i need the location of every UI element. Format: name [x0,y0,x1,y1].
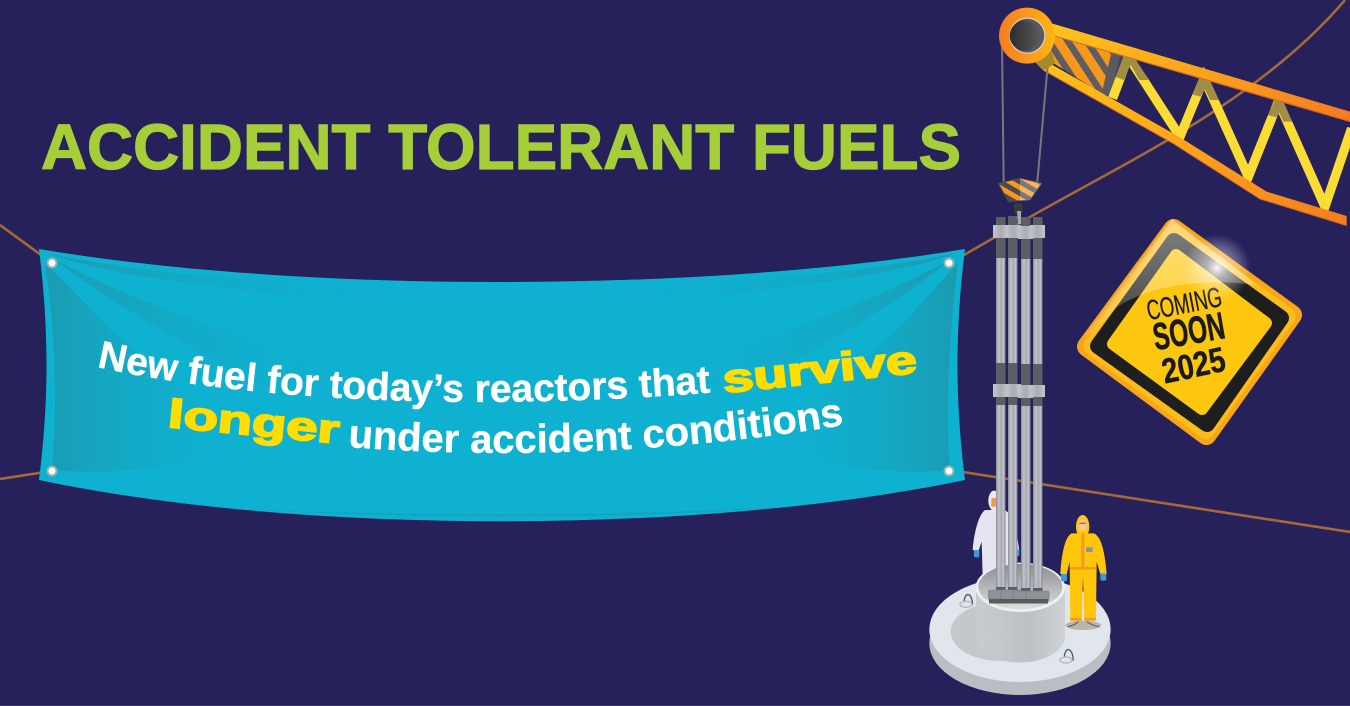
grommets [48,258,954,476]
rods [996,217,1042,590]
upper chord [1048,23,1350,122]
banner text [99,338,919,454]
banner [39,249,965,522]
cables [1002,43,1049,182]
banner text: under accident conditions [350,405,842,454]
sign text: 2025 [1158,340,1229,391]
title: ACCIDENT TOLERANT FUELS [41,111,961,183]
upper clamp [993,225,1045,239]
banner text: longer [166,392,342,452]
banner text: New fuel for today’s reactors that [99,341,710,410]
worker in yellow suit [1060,515,1107,630]
sign text [1144,281,1229,391]
lower clamp [993,384,1045,398]
banner folds [45,253,958,517]
lifting lugs [964,595,1073,661]
sign border [1087,229,1292,435]
hook connector [1017,211,1021,224]
crane hazard plate [1048,33,1120,95]
sign text: COMING [1144,281,1224,326]
sign yellow face [1113,255,1266,409]
fuel rod assembly [988,211,1049,604]
crane [998,8,1350,226]
rod feet [988,590,1049,601]
dark rod sections [996,216,1042,592]
bottom edge line [0,705,1350,706]
support ropes [0,0,1350,532]
pulley [999,8,1055,71]
worker in white suit [973,491,1019,577]
lower chord [1033,60,1347,226]
banner text: survive [720,338,919,402]
base plate [929,577,1111,695]
reactor base scene [929,491,1111,695]
banner cloth [39,249,965,521]
central cylinder [976,563,1065,662]
truss struts [1113,57,1350,207]
sign black ring [1098,241,1281,424]
sign glare [1082,219,1257,340]
sign text: SOON [1150,305,1228,359]
warning sign [1082,219,1292,435]
hook block [998,178,1042,202]
